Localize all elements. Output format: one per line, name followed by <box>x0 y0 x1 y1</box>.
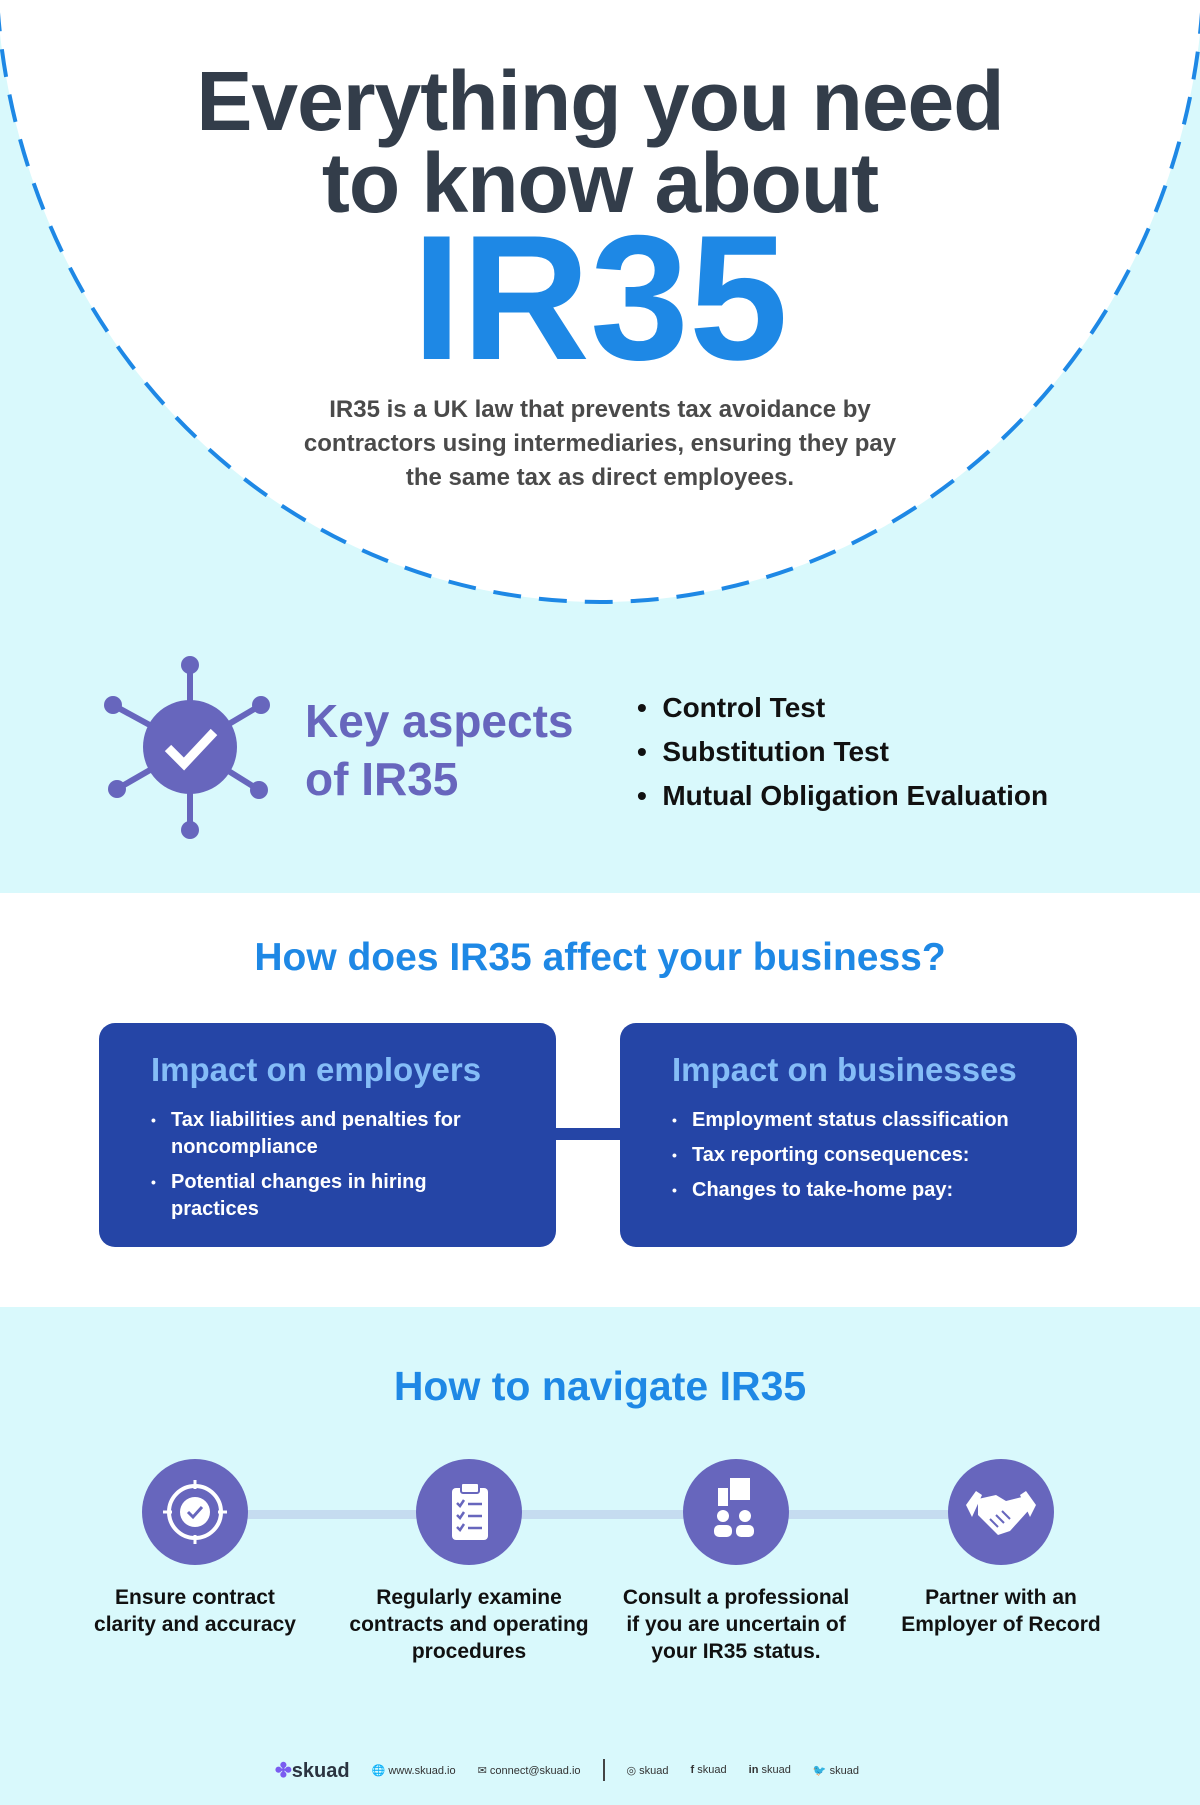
heading: affect business: How does IR35 affect your business? <box>254 936 946 979</box>
timeline line <box>195 1510 1001 1519</box>
footer: in skuad <box>749 1764 791 1776</box>
caption 2: Regularly examine <box>376 1586 562 1609</box>
icon: handshake <box>948 1459 1054 1565</box>
panel: employers: Potential changes in hiring practices <box>171 1171 427 1220</box>
intro text <box>304 396 896 491</box>
footer <box>275 1759 859 1782</box>
caption 2: contracts and operating <box>349 1613 589 1636</box>
caption 4: Partner with an <box>925 1586 1077 1609</box>
caption 3: if you are uncertain of <box>626 1613 846 1636</box>
panel: employers <box>99 1023 556 1247</box>
panel: businesses: Employment status classification <box>692 1109 1009 1131</box>
icon: consult <box>683 1459 789 1565</box>
caption 2 <box>349 1586 589 1663</box>
heading: key aspects: of IR35 <box>305 753 458 805</box>
footer: ✤skuad <box>275 1760 350 1782</box>
title <box>196 54 1004 230</box>
footer: f skuad <box>691 1764 727 1776</box>
list: key aspects <box>637 692 1048 811</box>
caption 1 <box>94 1586 296 1636</box>
caption 3 <box>623 1586 849 1663</box>
caption 3: your IR35 status. <box>651 1640 821 1663</box>
caption 1: clarity and accuracy <box>94 1613 296 1636</box>
heading: navigate: How to navigate IR35 <box>394 1363 806 1409</box>
footer: ✉ connect@skuad.io <box>478 1764 581 1776</box>
footer: 🌐 www.skuad.io <box>372 1764 456 1776</box>
title: Everything you need <box>196 54 1004 148</box>
connector <box>550 1128 630 1140</box>
panel: businesses <box>620 1023 1077 1247</box>
icon: network check <box>104 656 270 839</box>
caption 3: Consult a professional <box>623 1586 849 1609</box>
title: IR35: IR35 <box>412 198 788 397</box>
caption 2: procedures <box>412 1640 526 1663</box>
white section <box>0 893 1200 1307</box>
panel: businesses: Impact on businesses <box>672 1051 1017 1088</box>
heading: key aspects: Key aspects <box>305 695 574 747</box>
panel: businesses: Changes to take-home pay: <box>692 1179 953 1201</box>
caption 1: Ensure contract <box>115 1586 275 1609</box>
heading: key aspects <box>305 695 574 805</box>
panel: employers: Tax liabilities and penalties for noncompliance <box>171 1109 461 1158</box>
list: key aspects: • Substitution Test <box>637 736 889 767</box>
footer: ◎ skuad <box>627 1764 669 1776</box>
caption 4: Employer of Record <box>901 1613 1101 1636</box>
caption 4 <box>901 1586 1101 1636</box>
intro text: IR35 is a UK law that prevents tax avoidance by <box>329 396 871 423</box>
icon: clipboard <box>416 1459 522 1565</box>
panel: businesses: Tax reporting consequences: <box>692 1144 969 1166</box>
background: top half circle <box>0 0 1200 604</box>
footer: 🐦 skuad <box>813 1764 859 1776</box>
intro text: the same tax as direct employees. <box>406 464 794 491</box>
panel: employers: Impact on employers <box>151 1051 481 1088</box>
icon: target <box>142 1459 248 1565</box>
list: key aspects: • Mutual Obligation Evaluation <box>637 780 1048 811</box>
list: key aspects: • Control Test <box>637 692 825 723</box>
intro text: contractors using intermediaries, ensuring they pay <box>304 430 896 457</box>
title: to know about <box>322 136 878 230</box>
